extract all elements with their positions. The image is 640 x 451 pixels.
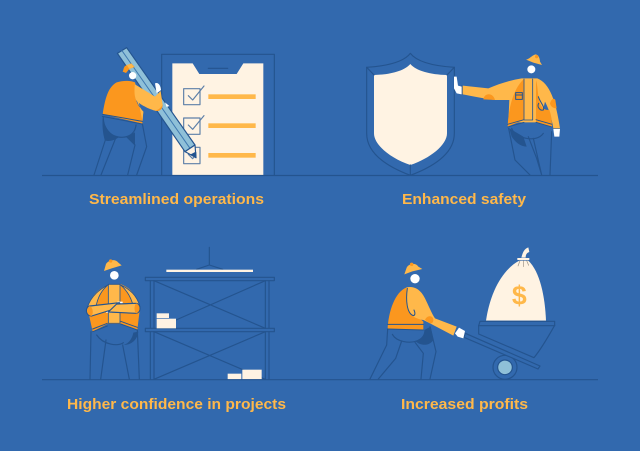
panel: enhanced safety — [367, 53, 560, 208]
worker hands — [454, 77, 560, 137]
worker arm — [407, 287, 457, 336]
pencil — [117, 48, 196, 158]
head and hard hat — [104, 259, 122, 280]
worker vest — [508, 79, 552, 127]
head and hard hat — [404, 263, 422, 283]
heading: streamlined operations: Streamlined operations — [89, 191, 264, 208]
worker hand — [455, 328, 465, 338]
stacked boxes — [157, 313, 262, 379]
heading: enhanced safety: Enhanced safety — [402, 191, 527, 208]
worker arm — [134, 83, 169, 111]
worker legs — [94, 117, 147, 175]
panel: increased profits — [370, 247, 555, 413]
clipboard — [162, 54, 274, 175]
illustration: clipboard with checklist — [162, 54, 274, 175]
scaffold frame — [145, 247, 274, 379]
worker legs — [509, 128, 552, 175]
worker legs — [90, 330, 139, 379]
panel: higher confidence in projects — [67, 247, 286, 413]
heading: increased profits: Increased profits — [401, 396, 528, 413]
money bag — [486, 247, 546, 321]
ground lines — [42, 176, 598, 380]
dollar sign: $ — [512, 281, 527, 311]
worker vest — [102, 81, 143, 124]
checklist — [184, 86, 256, 164]
worker vest — [87, 284, 140, 332]
worker arm and sleeve — [462, 78, 560, 128]
crossed arms — [86, 302, 140, 316]
illustration: worker pushing — [370, 263, 465, 379]
panel: streamlined operations — [89, 48, 274, 208]
illustration: worker — [454, 54, 560, 175]
worker legs — [370, 327, 436, 379]
shield — [367, 53, 454, 175]
illustration: worker with crossed arms — [86, 259, 140, 379]
wheelbarrow — [464, 321, 555, 379]
illustration: scaffold — [145, 247, 274, 379]
head and hard hat — [123, 63, 136, 79]
head and hard hat — [526, 54, 542, 73]
illustration: pencil worker — [94, 48, 196, 175]
heading: higher confidence in projects: Higher confidence in projects — [67, 396, 286, 413]
illustration: money bag and wheelbarrow — [464, 247, 555, 379]
worker vest — [388, 287, 423, 330]
